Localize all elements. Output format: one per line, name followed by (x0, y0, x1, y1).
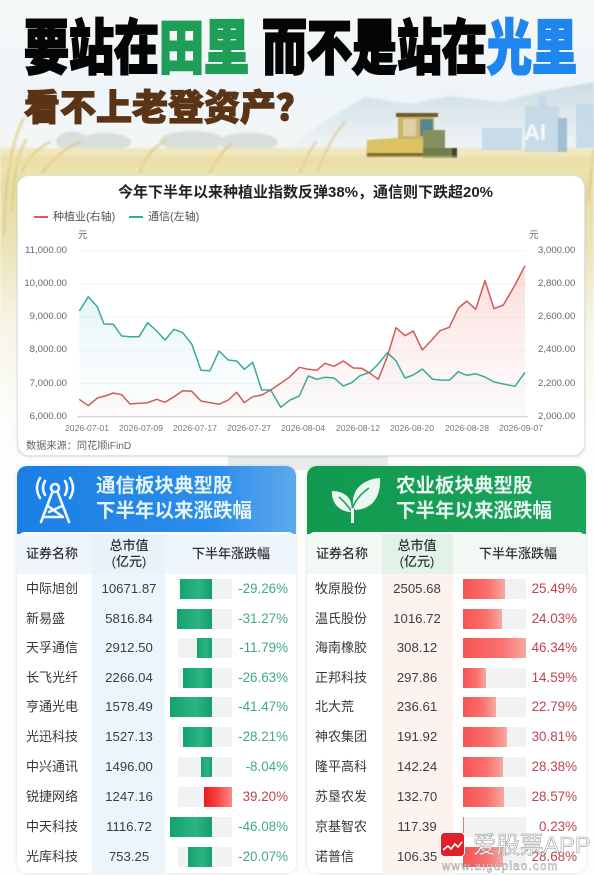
row: 中际旭创: -29.26% (238, 581, 288, 596)
row: 中天科技: 中天科技 (26, 819, 78, 834)
row: 苏垦农发: 28.57% (532, 789, 577, 804)
row: 锐捷网络: 1247.16 (105, 789, 153, 804)
row: 锐捷网络: 39.20% (243, 789, 288, 804)
row: 中际旭创: 中际旭创 (26, 581, 78, 596)
row: 海南橡胶: 海南橡胶 (315, 640, 367, 655)
row: 长飞光纤 (26, 668, 288, 688)
watermark url: www.aigupiao.com (442, 861, 559, 873)
panel: telecom table (17, 466, 296, 873)
x axis dates: 2026-08-12 (336, 423, 380, 433)
chart title: 今年下半年以来种植业指数反弹38%，通信则下跌超20% (118, 184, 493, 201)
right axis labels: 2,800.00 (538, 278, 575, 289)
icon: leaf sprout (332, 478, 380, 523)
row: 中际旭创 (26, 579, 288, 599)
row: 天孚通信: 天孚通信 (26, 640, 78, 655)
panel: agriculture table (307, 466, 586, 873)
row: 中际旭创: 10671.87 (101, 581, 156, 596)
agriculture column headers: 总市值 (397, 538, 436, 553)
telecom column header tint (17, 534, 296, 574)
subtitle: 看不上老登资产？ (24, 87, 312, 128)
row: 长飞光纤: 2266.04 (105, 670, 153, 685)
agriculture heading (396, 475, 552, 522)
right axis labels: 2,000.00 (538, 411, 575, 422)
row: 温氏股份: 温氏股份 (315, 611, 367, 626)
legend: planting: 种植业(右轴) (53, 211, 115, 223)
x axis dates: 2026-07-17 (173, 423, 217, 433)
data source: 数据来源：同花顺iFinD (26, 441, 131, 452)
row: 北大荒: 236.61 (397, 699, 437, 714)
x axis dates: 2026-08-28 (445, 423, 489, 433)
agriculture header band (307, 466, 586, 534)
title: 要站在田里 而不是站在光里 (24, 15, 577, 82)
row: 长飞光纤: 长飞光纤 (26, 670, 78, 685)
left axis labels: 9,000.00 (30, 311, 67, 322)
telecom column headers: 证券名称 (26, 546, 78, 561)
row: 神农集团: 30.81% (532, 729, 577, 744)
row: 光库科技: -20.07% (238, 849, 288, 864)
x axis dates: 2026-08-20 (390, 423, 434, 433)
right axis labels: 元 (529, 230, 539, 241)
row: 牧原股份: 25.49% (532, 581, 577, 596)
row: 神农集团: 191.92 (397, 729, 437, 744)
row: 诺普信: 106.35 (397, 849, 437, 864)
background: field scene (0, 12, 594, 388)
row: 中兴通讯: 中兴通讯 (26, 759, 78, 774)
row: 苏垦农发: 132.70 (397, 789, 437, 804)
icon: tractor (366, 113, 457, 158)
background: lower page (0, 458, 594, 875)
row: 海南橡胶: 46.34% (532, 640, 577, 655)
telecom column tint (92, 534, 165, 873)
agriculture heading: 下半年以来涨跌幅 (396, 500, 552, 522)
telecom heading: 通信板块典型股 (96, 475, 233, 497)
x axis dates: 2026-07-01 (65, 423, 109, 433)
x axis dates (65, 423, 543, 433)
row: 天孚通信: 2912.50 (105, 640, 153, 655)
row: 京基智农: 京基智农 (315, 819, 367, 834)
telecom column headers (26, 538, 270, 569)
agriculture heading: 农业板块典型股 (396, 475, 533, 497)
x axis dates: 2026-07-27 (227, 423, 271, 433)
row: 亨通光电 (26, 697, 288, 717)
row: 北大荒: 北大荒 (315, 699, 354, 714)
left axis labels: 10,000.00 (24, 278, 67, 289)
row: 牧原股份 (315, 579, 577, 599)
telecom heading (96, 475, 252, 522)
row: 温氏股份: 24.03% (532, 611, 577, 626)
row: 京基智农: 117.39 (397, 819, 437, 834)
row: 海南橡胶: 308.12 (397, 640, 437, 655)
city with AI text (482, 96, 594, 152)
row: 牧原股份: 牧原股份 (315, 581, 367, 596)
agriculture column headers: 证券名称 (316, 546, 368, 561)
row: 亨通光电: -41.47% (238, 699, 288, 714)
icon: watermark logo (440, 832, 465, 857)
row: 诺普信: 诺普信 (315, 849, 354, 864)
row: 诺普信 (315, 847, 577, 867)
row: 中兴通讯: 1496.00 (105, 759, 153, 774)
row: 光迅科技: 1527.13 (105, 729, 153, 744)
row: 苏垦农发: 苏垦农发 (315, 789, 367, 804)
x axis dates: 2026-09-07 (499, 423, 543, 433)
row: 新易盛: -31.27% (238, 611, 288, 626)
left axis labels: 7,000.00 (30, 378, 67, 389)
row: 温氏股份: 1016.72 (393, 611, 441, 626)
telecom table body background (17, 532, 296, 873)
x axis dates: 2026-08-04 (281, 423, 325, 433)
row: 京基智农 (315, 817, 577, 837)
row: 正邦科技: 14.59% (532, 670, 577, 685)
row: 牧原股份: 2505.68 (393, 581, 441, 596)
watermark (440, 832, 591, 873)
row: 锐捷网络: 锐捷网络 (26, 789, 78, 804)
right axis labels: 2,600.00 (538, 311, 575, 322)
row: 亨通光电: 1578.49 (105, 699, 153, 714)
row: 新易盛 (26, 609, 288, 629)
telecom column headers: 下半年涨跌幅 (192, 546, 270, 561)
left axis labels: 8,000.00 (30, 344, 67, 355)
decorative blur strip (228, 456, 388, 470)
row: 亨通光电: 亨通光电 (26, 699, 78, 714)
row: 隆平高科: 142.24 (397, 759, 437, 774)
row: 中天科技: 1116.72 (106, 819, 152, 834)
row: 光迅科技: -28.21% (238, 729, 288, 744)
agriculture table body background (307, 532, 586, 873)
row: 新易盛: 新易盛 (26, 611, 65, 626)
telecom column headers: 总市值 (109, 538, 148, 553)
agriculture rows (315, 579, 577, 867)
telecom heading: 下半年以来涨跌幅 (96, 500, 252, 522)
telecom rows (26, 579, 288, 867)
icon: signal tower (36, 476, 74, 524)
row: 北大荒: 22.79% (532, 699, 577, 714)
legend (34, 210, 199, 223)
panel: line chart card (17, 175, 585, 456)
text: 元 (78, 230, 88, 241)
row: 苏垦农发 (315, 787, 577, 807)
agriculture column header mid tint (382, 534, 453, 574)
row: 中天科技 (26, 817, 288, 837)
row: 京基智农: 0.23% (539, 819, 577, 834)
right axis labels: 2,400.00 (538, 344, 575, 355)
agriculture column header tint (307, 534, 586, 574)
row: 光库科技: 753.25 (109, 849, 149, 864)
row: 长飞光纤: -26.63% (238, 670, 288, 685)
agriculture column headers: (亿元) (400, 554, 434, 569)
row: 正邦科技 (315, 668, 577, 688)
row: 中兴通讯: -8.04% (246, 759, 288, 774)
row: 神农集团: 神农集团 (315, 729, 367, 744)
row: 天孚通信: -11.79% (239, 640, 288, 655)
watermark name: 爱股票APP (473, 832, 591, 858)
agriculture column tint (382, 534, 453, 873)
left axis labels: 11,000.00 (25, 245, 67, 256)
row: 北大荒 (315, 697, 577, 717)
row: 神农集团 (315, 727, 577, 747)
row: 新易盛: 5816.84 (105, 611, 153, 626)
row: 光库科技 (26, 847, 288, 867)
legend: telecom: 通信(左轴) (148, 211, 199, 223)
x axis dates: 2026-07-09 (119, 423, 163, 433)
row: 光库科技: 光库科技 (26, 849, 78, 864)
row: 中天科技: -46.08% (238, 819, 288, 834)
row: 中兴通讯 (26, 757, 288, 777)
right axis labels (529, 230, 575, 422)
row: 光迅科技 (26, 727, 288, 747)
right axis labels: 2,200.00 (538, 378, 575, 389)
row: 锐捷网络 (26, 787, 288, 807)
row: 隆平高科: 隆平高科 (315, 759, 367, 774)
telecom column headers: (亿元) (112, 554, 146, 569)
row: 正邦科技: 297.86 (397, 670, 437, 685)
row: 温氏股份 (315, 609, 577, 629)
agriculture column headers (316, 538, 557, 569)
row: 诺普信: 28.68% (532, 849, 577, 864)
row: 正邦科技: 正邦科技 (315, 670, 367, 685)
row: 隆平高科 (315, 757, 577, 777)
city with AI text: AI (524, 120, 546, 145)
agriculture column headers: 下半年涨跌幅 (479, 546, 557, 561)
telecom header band (17, 466, 296, 534)
telecom line (79, 297, 525, 407)
left axis labels (24, 230, 88, 422)
line chart (77, 250, 528, 418)
row: 光迅科技: 光迅科技 (26, 729, 78, 744)
row: 天孚通信 (26, 638, 288, 658)
right axis labels: 3,000.00 (538, 245, 575, 256)
row: 隆平高科: 28.38% (532, 759, 577, 774)
row: 海南橡胶 (315, 638, 577, 658)
planting line (79, 266, 525, 406)
left axis labels: 6,000.00 (30, 411, 67, 422)
